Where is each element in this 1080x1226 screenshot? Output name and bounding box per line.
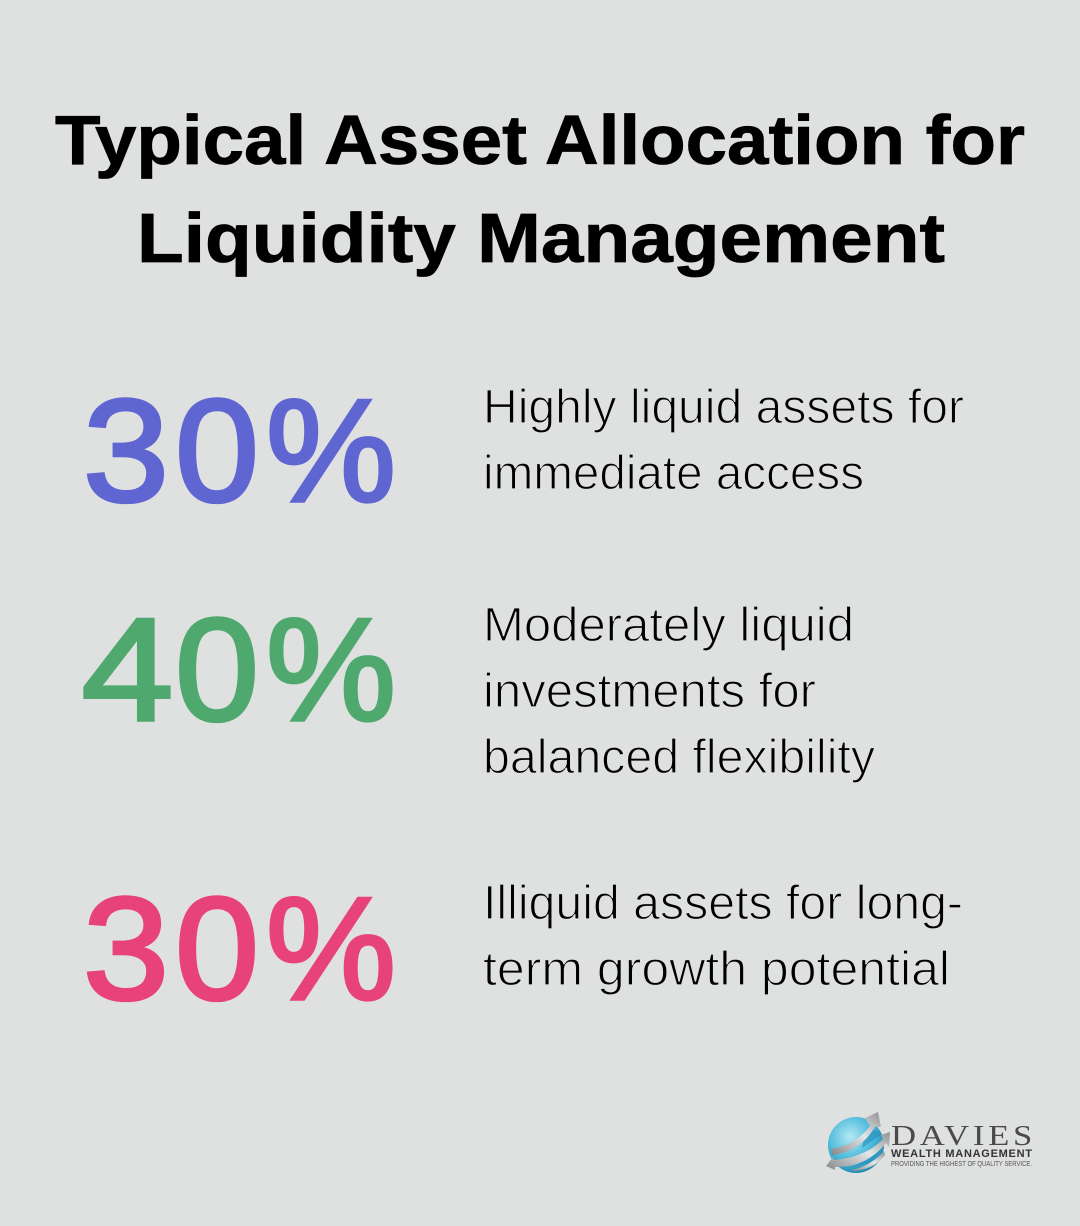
stat row: 30% highly liquid xyxy=(83,369,964,532)
description: moderately liquid investments: Moderately liquid xyxy=(483,599,854,652)
stat number: 30% xyxy=(83,369,396,532)
stat number: 30%: 0 xyxy=(175,867,259,1030)
stat number: 30%: 3 xyxy=(83,369,169,532)
description: illiquid assets xyxy=(483,877,963,996)
logo: Davies Wealth Management xyxy=(826,1112,1036,1173)
stat number: 40%: 4 xyxy=(82,588,174,751)
stat number: 40% xyxy=(82,588,396,751)
stat number: 40%: % xyxy=(266,588,396,751)
description: highly liquid assets xyxy=(483,381,964,500)
stat number: 30%: % xyxy=(266,369,396,532)
description: illiquid assets: Illiquid assets for long- xyxy=(483,877,963,930)
description: illiquid assets: term growth potential xyxy=(483,943,950,996)
description: highly liquid assets: Highly liquid assets for xyxy=(483,381,964,434)
logo wordmark: WEALTH MANAGEMENT xyxy=(891,1148,1032,1160)
logo wordmark: DAVIES xyxy=(891,1121,1036,1152)
description: highly liquid assets: immediate access xyxy=(483,447,864,500)
stat number: 30%: 0 xyxy=(175,369,259,532)
stat number: 30%: % xyxy=(266,867,396,1030)
logo wordmark xyxy=(891,1121,1036,1168)
description: moderately liquid investments: balanced flexibility xyxy=(483,731,875,784)
stat number: 30% xyxy=(83,867,396,1030)
title xyxy=(55,101,1025,277)
stat row: 40% moderately liquid xyxy=(82,588,875,784)
description: moderately liquid investments: investments for xyxy=(483,665,816,718)
icon: globe with arrows xyxy=(826,1112,890,1173)
description: moderately liquid investments xyxy=(483,599,875,784)
stat row: 30% illiquid xyxy=(83,867,963,1030)
stat number: 40%: 0 xyxy=(175,588,259,751)
title: Liquidity Management xyxy=(137,199,945,277)
logo wordmark: PROVIDING THE HIGHEST OF QUALITY SERVICE. xyxy=(891,1161,1032,1168)
stat number: 30%: 3 xyxy=(83,867,169,1030)
title: Typical Asset Allocation for xyxy=(55,101,1025,179)
